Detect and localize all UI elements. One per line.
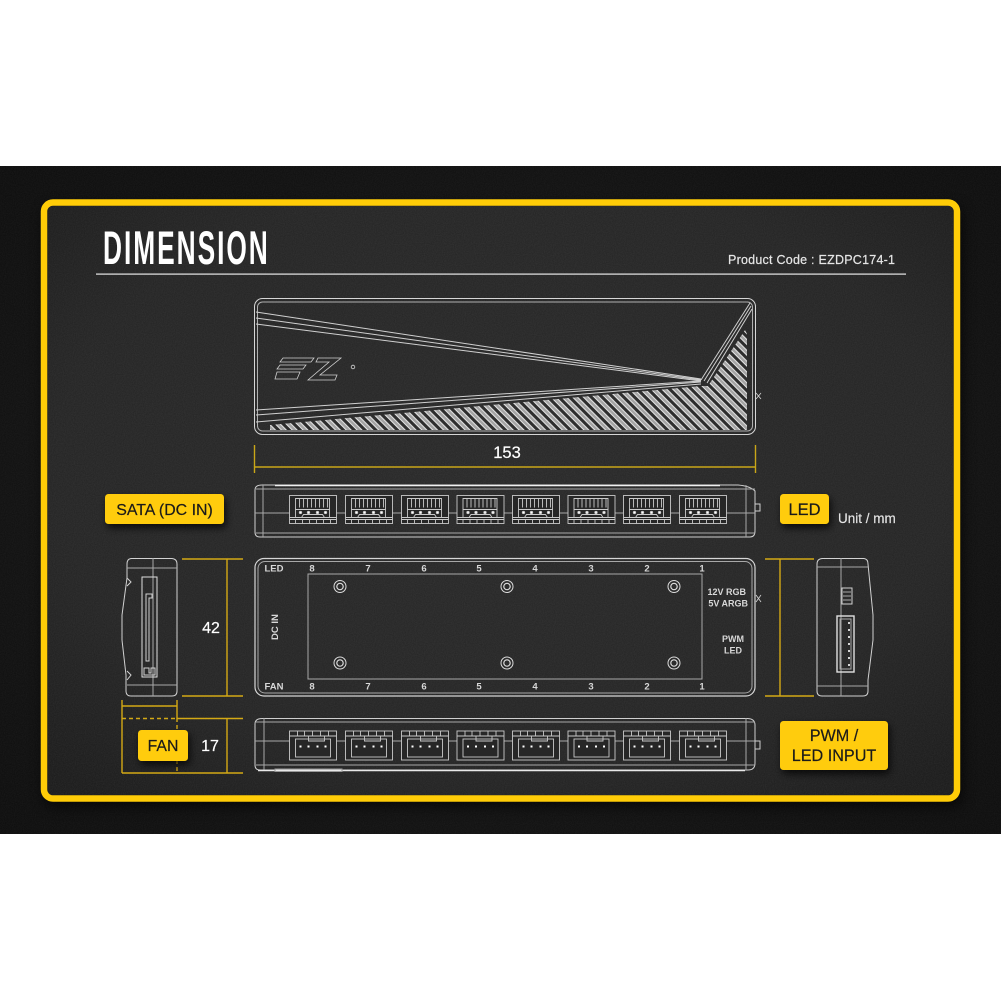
panel: yellow framed dimension card (44, 202, 957, 798)
LED row labels: 7 (365, 564, 371, 574)
FAN row labels: 2 (644, 682, 650, 692)
background: dark band (0, 166, 1001, 834)
switch labels: 5V ARGB (708, 598, 748, 608)
switch labels: 12V RGB (707, 587, 746, 597)
side view: LED connectors (255, 485, 760, 537)
rear view: labelled board (255, 558, 761, 696)
LED row labels: 1 (699, 564, 705, 574)
dimension value 17: 17 (201, 738, 219, 755)
FAN row labels (264, 682, 705, 692)
FAN row labels: 7 (365, 682, 371, 692)
PWM LED labels: LED (724, 646, 743, 656)
dimension: right height (765, 559, 814, 696)
dimension: height 42 (182, 559, 243, 696)
switch labels (707, 587, 748, 608)
mounting screws (334, 580, 680, 669)
unit label: Unit / mm (838, 511, 896, 526)
badge: FAN: FAN (148, 738, 178, 755)
product code: Product Code : EZDPC174-1 (728, 253, 895, 267)
badge: LED (780, 494, 829, 524)
FAN row labels: FAN (264, 682, 284, 692)
LED row labels: 4 (532, 564, 538, 574)
side view: fan connectors (255, 718, 760, 772)
FAN row labels: 3 (588, 682, 594, 692)
title: DIMENSION (103, 223, 270, 275)
LED row labels: 3 (588, 564, 594, 574)
badge: PWM / LED INPUT: PWM / (810, 727, 859, 745)
badge: LED: LED (788, 501, 821, 519)
LED row labels (264, 564, 705, 574)
LED row labels: 8 (309, 564, 315, 574)
dimension: width 153 (254, 444, 756, 473)
badge: FAN (138, 730, 188, 761)
badge: PWM / LED INPUT: LED INPUT (792, 747, 876, 765)
FAN row labels: 8 (309, 682, 315, 692)
top view of hub (254, 298, 761, 434)
dimension: width 153: 153 (493, 444, 521, 462)
dimension: depth and thickness 17 (122, 700, 243, 773)
FAN row labels: 1 (699, 682, 705, 692)
FAN row labels: 6 (421, 682, 427, 692)
PWM LED labels (722, 634, 744, 656)
icon: EZ logo outline (275, 358, 341, 380)
right end view: PWM and switch (817, 558, 873, 696)
FAN row labels: 5 (476, 682, 482, 692)
PWM LED labels: PWM (722, 634, 744, 644)
LED row labels: LED (264, 564, 284, 574)
LED row labels: 6 (421, 564, 427, 574)
badge: SATA (DC IN): SATA (DC IN) (116, 502, 213, 519)
badge: SATA (DC IN) (105, 494, 224, 524)
LED row labels: 5 (476, 564, 482, 574)
LED row labels: 2 (644, 564, 650, 574)
FAN row labels: 4 (532, 682, 538, 692)
left end view: SATA port (122, 558, 177, 696)
DC IN label: DC IN (270, 614, 281, 640)
badge: PWM / LED INPUT (780, 721, 888, 770)
dimension: height 42: 42 (202, 620, 220, 637)
